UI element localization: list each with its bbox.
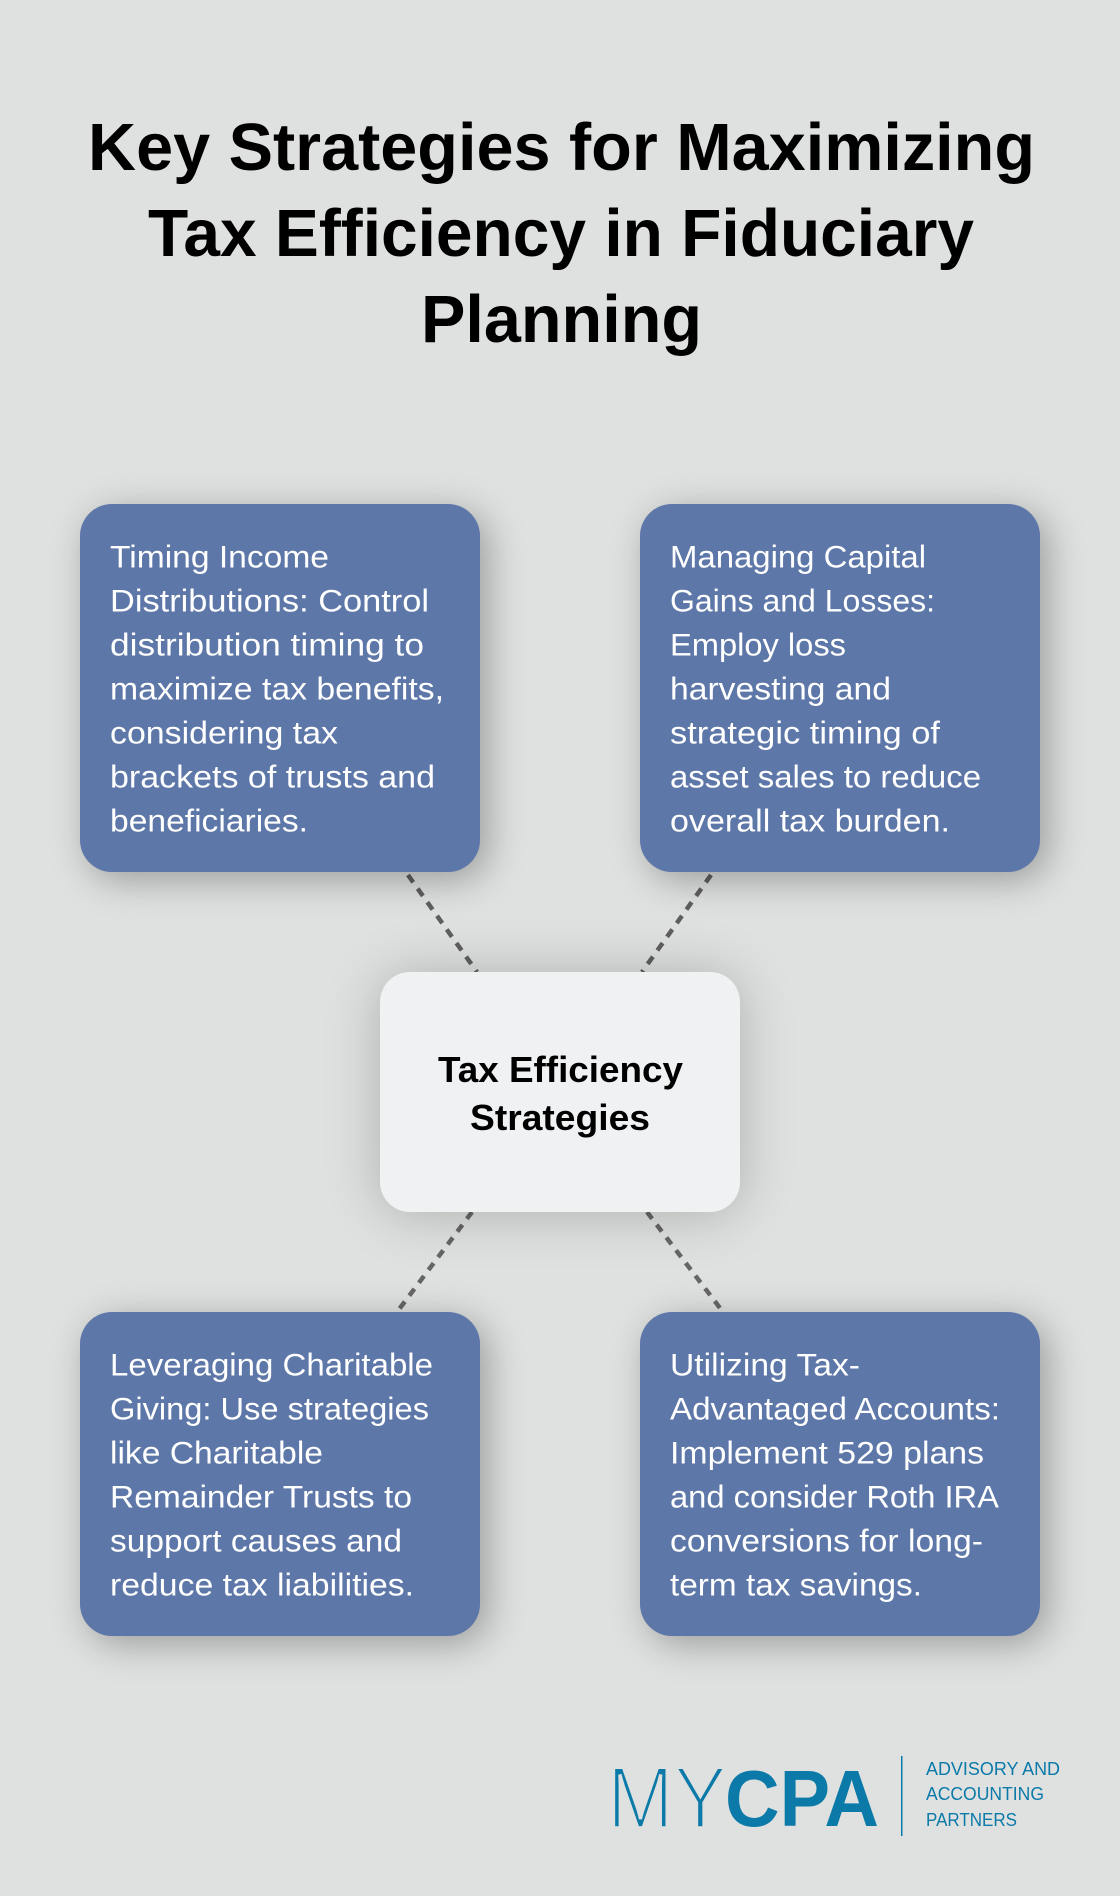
panel text: conversions for long- <box>670 1522 983 1558</box>
logo tagline: PARTNERS <box>926 1810 1017 1830</box>
centre label <box>438 1049 684 1138</box>
panel text <box>110 538 444 838</box>
logo tagline <box>926 1759 1060 1830</box>
panel text: Utilizing Tax- <box>670 1346 860 1382</box>
panel text: Leveraging Charitable <box>110 1346 433 1382</box>
panel text <box>670 538 981 838</box>
title: Key Strategies for Maximizing <box>88 111 1035 185</box>
panel text: and consider Roth IRA <box>670 1478 999 1514</box>
panel text: Implement 529 plans <box>670 1434 984 1470</box>
centre label: Tax Efficiency <box>438 1049 684 1090</box>
logo wordmark <box>607 1748 879 1847</box>
connector: charitable giving to centre <box>397 1212 472 1312</box>
panel text: asset sales to reduce <box>670 758 981 794</box>
centre label: Strategies <box>470 1097 650 1138</box>
panel text: Managing Capital <box>670 538 926 574</box>
panel text: distribution timing to <box>110 626 424 662</box>
logo wordmark: MY <box>607 1748 727 1847</box>
panel text: harvesting and <box>670 670 891 706</box>
panel text: Remainder Trusts to <box>110 1478 412 1514</box>
title: Tax Efficiency in Fiduciary <box>148 197 974 271</box>
panel text: support causes and <box>110 1522 402 1558</box>
panel: leveraging charitable giving <box>80 1312 480 1636</box>
panel text: beneficiaries. <box>110 802 308 838</box>
logo tagline: ACCOUNTING <box>926 1784 1044 1804</box>
panel text: Advantaged Accounts: <box>670 1390 1000 1426</box>
panel text: reduce tax liabilities. <box>110 1566 414 1602</box>
connector: capital gains to centre <box>642 875 711 972</box>
panel text: Distributions: Control <box>110 582 429 618</box>
panel text: Timing Income <box>110 538 329 574</box>
panel text: maximize tax benefits, <box>110 670 444 706</box>
title: Planning <box>421 283 702 357</box>
panel text: term tax savings. <box>670 1566 922 1602</box>
title <box>88 111 1035 357</box>
panel: managing capital gains and losses <box>640 504 1040 872</box>
panel: utilizing tax-advantaged accounts <box>640 1312 1040 1636</box>
panel text: considering tax <box>110 714 338 750</box>
panel: centre tax efficiency strategies <box>380 972 740 1212</box>
panel text <box>670 1346 1000 1602</box>
panel text: Giving: Use strategies <box>110 1390 429 1426</box>
logo tagline: ADVISORY AND <box>926 1759 1060 1779</box>
connector: timing income to centre <box>408 875 477 972</box>
panel text <box>110 1346 433 1602</box>
connector: tax-advantaged accounts to centre <box>647 1212 723 1312</box>
panel text: brackets of trusts and <box>110 758 435 794</box>
logo wordmark: CPA <box>725 1754 879 1843</box>
panel text: Gains and Losses: <box>670 582 935 618</box>
panel text: like Charitable <box>110 1434 323 1470</box>
panel text: strategic timing of <box>670 714 940 750</box>
logo: MYCPA <box>607 1748 1060 1847</box>
panel text: overall tax burden. <box>670 802 950 838</box>
panel: timing income distributions <box>80 504 480 872</box>
logo divider <box>901 1756 902 1836</box>
panel text: Employ loss <box>670 626 846 662</box>
